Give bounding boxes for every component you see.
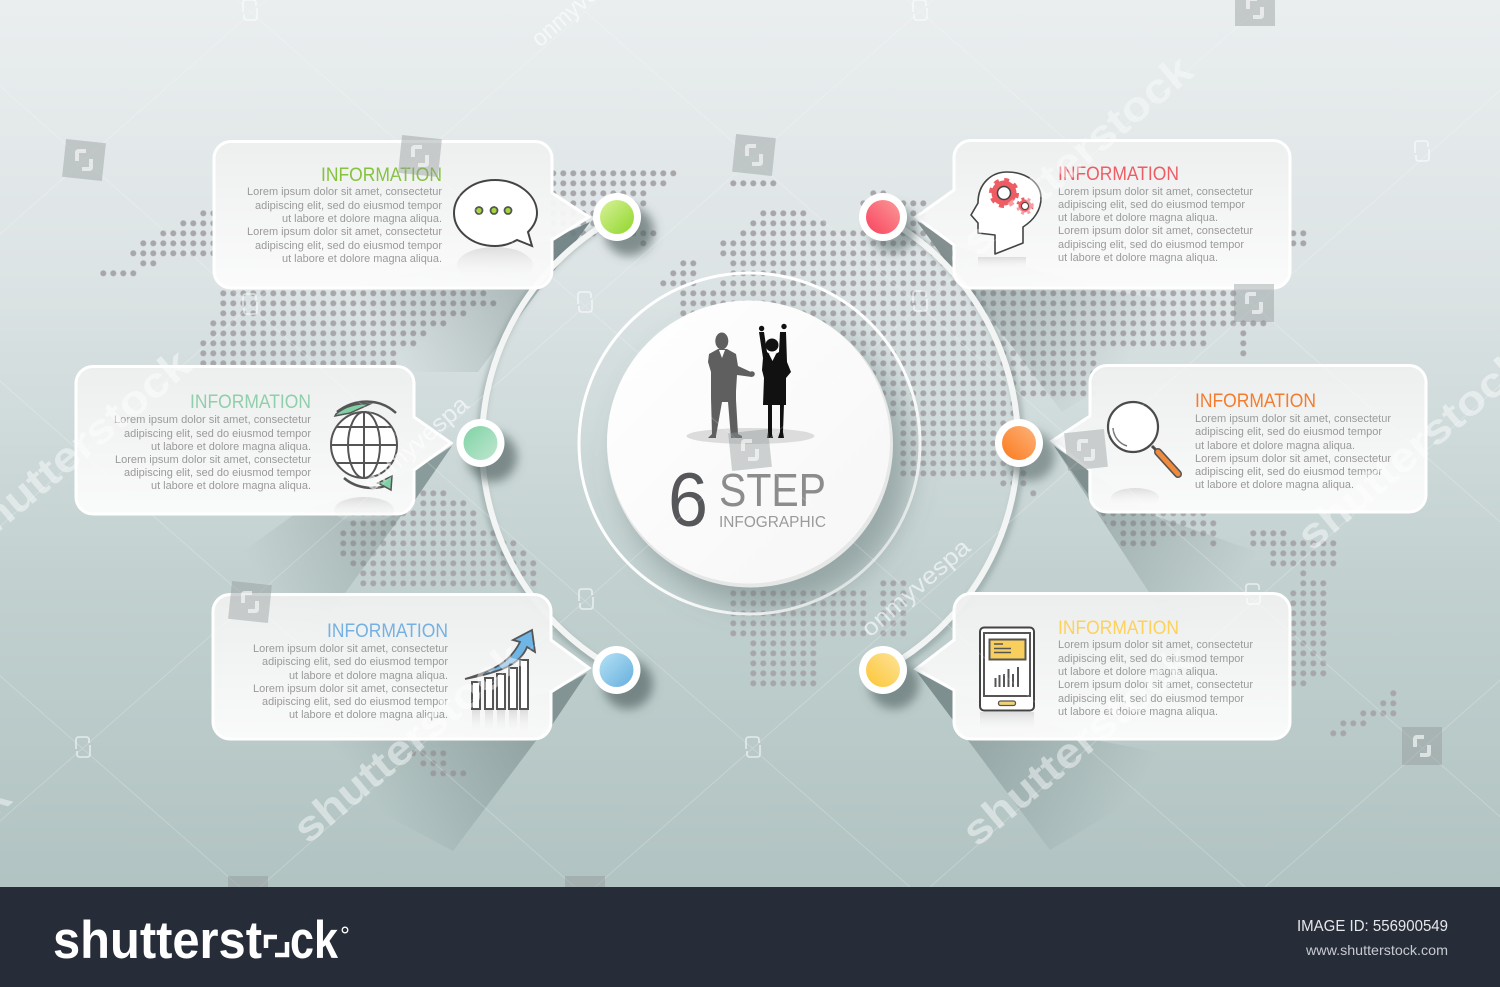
panel: bottom right information	[916, 594, 1290, 739]
text block: ut labore et dolore magna aliqua.	[1058, 212, 1218, 224]
text block: adipiscing elit, sed do eiusmod tempor	[1058, 653, 1244, 665]
man	[708, 332, 755, 438]
long shadows	[190, 221, 1280, 851]
arc: left connector	[480, 217, 617, 672]
text block: Lorem ipsum dolor sit amet, consectetur	[115, 454, 311, 466]
title: 6 STEP INFOGRAPHIC: 6	[668, 458, 708, 543]
node: orange	[995, 419, 1055, 481]
text block: Lorem ipsum dolor sit amet, consectetur	[247, 226, 442, 238]
image id: IMAGE ID: 556900549	[1297, 918, 1448, 935]
text block: ut labore et dolore magna aliqua.	[151, 441, 311, 453]
text block: ut labore et dolore magna aliqua.	[282, 253, 442, 265]
arc: right connector	[883, 217, 1021, 672]
node: red	[859, 193, 917, 253]
text block	[1195, 413, 1391, 491]
text block: adipiscing elit, sed do eiusmod tempor	[262, 696, 448, 708]
text block: adipiscing elit, sed do eiusmod tempor	[1058, 199, 1245, 211]
text block: Lorem ipsum dolor sit amet, consectetur	[253, 643, 448, 655]
title: 6 STEP INFOGRAPHIC: INFOGRAPHIC	[719, 514, 826, 531]
heading: INFORMATION	[1195, 391, 1316, 412]
disc rim	[607, 302, 893, 588]
text block: ut labore et dolore magna aliqua.	[151, 480, 311, 492]
watermark text: shutterstock	[953, 635, 1202, 855]
text block: Lorem ipsum dolor sit amet, consectetur	[1058, 679, 1253, 691]
panel: bottom left information	[213, 594, 589, 739]
text block: Lorem ipsum dolor sit amet, consectetur	[1195, 413, 1391, 425]
node: green	[593, 193, 654, 256]
panel: middle right information	[1052, 366, 1426, 512]
node: blue	[592, 646, 653, 709]
people illustration	[686, 324, 814, 444]
heading: INFORMATION	[1058, 618, 1179, 639]
text block	[247, 186, 442, 265]
text block: Lorem ipsum dolor sit amet, consectetur	[1058, 639, 1253, 651]
center circle	[579, 273, 920, 614]
text block: ut labore et dolore magna aliqua.	[1058, 666, 1218, 678]
text block	[1058, 186, 1253, 264]
text block: Lorem ipsum dolor sit amet, consectetur	[1195, 453, 1391, 465]
panel: top right information	[916, 140, 1290, 288]
panel: top left information	[214, 142, 589, 288]
text block: Lorem ipsum dolor sit amet, consectetur	[114, 414, 311, 426]
text block: adipiscing elit, sed do eiusmod tempor	[124, 428, 311, 440]
footer logo: ck	[290, 911, 338, 970]
disc shadow	[620, 317, 910, 607]
text block: ut labore et dolore magna aliqua.	[1195, 479, 1354, 491]
text block: Lorem ipsum dolor sit amet, consectetur	[1058, 186, 1253, 198]
text block: adipiscing elit, sed do eiusmod tempor	[255, 200, 442, 212]
icon: growth chart	[465, 630, 535, 736]
text block: adipiscing elit, sed do eiusmod tempor	[124, 467, 311, 479]
disc	[607, 300, 890, 584]
text block: Lorem ipsum dolor sit amet, consectetur	[1058, 225, 1253, 237]
woman	[759, 324, 791, 438]
text block: adipiscing elit, sed do eiusmod tempor	[1058, 693, 1244, 705]
heading: INFORMATION	[190, 392, 311, 413]
footer logo: shutterst	[53, 911, 262, 970]
text block: adipiscing elit, sed do eiusmod tempor	[255, 240, 442, 252]
text block: ut labore et dolore magna aliqua.	[1058, 252, 1218, 264]
text block	[1058, 639, 1253, 718]
outer ring	[579, 273, 920, 614]
icon: globe with arrows	[331, 402, 397, 523]
title: 6 STEP INFOGRAPHIC	[668, 458, 826, 543]
text block: ut labore et dolore magna aliqua.	[282, 213, 442, 225]
watermark text: onmyvespa	[856, 533, 976, 643]
heading: INFORMATION	[327, 621, 448, 642]
text block: Lorem ipsum dolor sit amet, consectetur	[253, 683, 448, 695]
watermark text: shutterstock	[953, 45, 1202, 265]
text block: ut labore et dolore magna aliqua.	[289, 709, 448, 721]
watermark text: onmyvespa	[358, 390, 475, 497]
watermark text: shutterstock	[284, 632, 533, 852]
panel: middle left information	[76, 366, 451, 523]
text block: ut labore et dolore magna aliqua.	[1058, 706, 1218, 718]
icon: magnifying glass	[1108, 402, 1178, 508]
icon: speech bubble	[454, 180, 537, 283]
title: 6 STEP INFOGRAPHIC: STEP	[719, 464, 826, 516]
text block: adipiscing elit, sed do eiusmod tempor	[1058, 239, 1244, 251]
text block: Lorem ipsum dolor sit amet, consectetur	[247, 186, 442, 198]
website: www.shutterstock.com	[1305, 942, 1448, 958]
heading: INFORMATION	[321, 165, 442, 186]
footer bar	[0, 887, 1500, 987]
icon: tablet with chart	[980, 628, 1034, 734]
text block: adipiscing elit, sed do eiusmod tempor	[1195, 466, 1382, 478]
text block: adipiscing elit, sed do eiusmod tempor	[262, 656, 448, 668]
heading: INFORMATION	[1058, 164, 1179, 185]
text block	[114, 414, 311, 492]
text block: ut labore et dolore magna aliqua.	[1195, 440, 1355, 452]
text block: ut labore et dolore magna aliqua.	[289, 670, 448, 682]
text block	[253, 643, 448, 721]
text block: adipiscing elit, sed do eiusmod tempor	[1195, 426, 1382, 438]
node: yellow	[859, 646, 919, 709]
icon: head with gears	[971, 172, 1041, 271]
dotted world map	[98, 168, 1398, 778]
node: mint	[456, 419, 517, 482]
